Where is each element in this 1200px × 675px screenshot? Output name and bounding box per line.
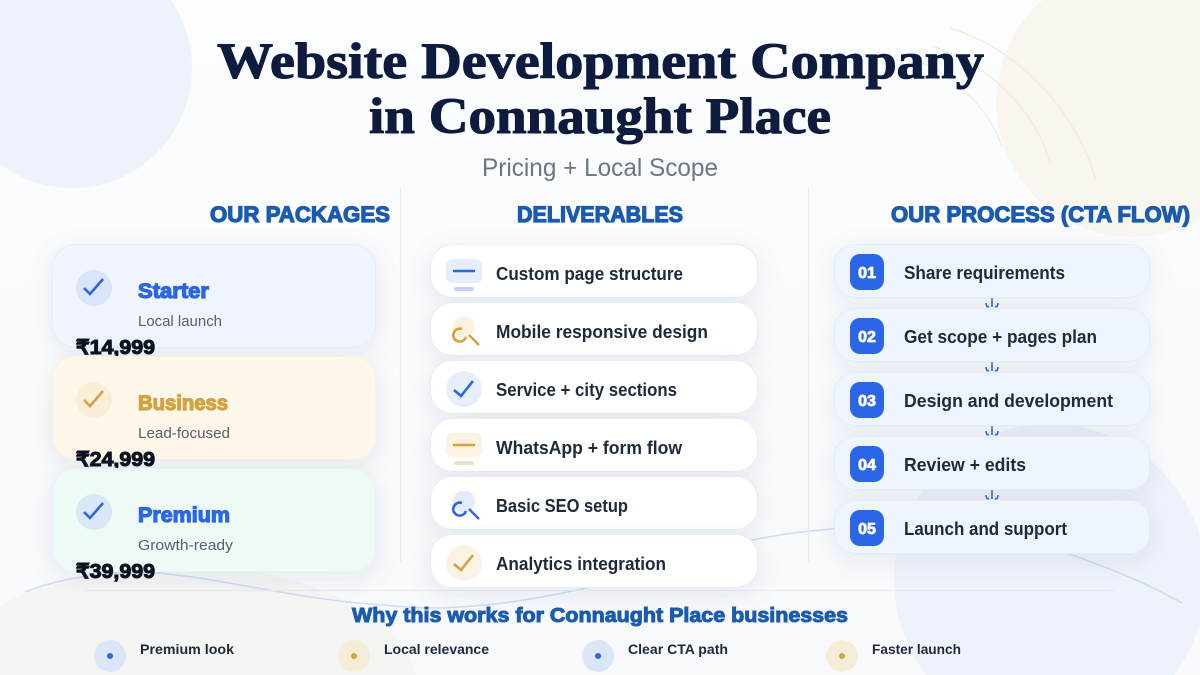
business name: Business bbox=[138, 392, 228, 415]
starter name: Starter bbox=[138, 280, 209, 303]
step 05 bbox=[834, 500, 1150, 554]
step 03 bbox=[834, 372, 1150, 426]
premium price: ₹39,999 bbox=[76, 561, 155, 583]
panel: process bbox=[834, 244, 1150, 554]
badge 05: 05 bbox=[858, 521, 876, 538]
icon: business check bbox=[76, 382, 112, 418]
step 04 bbox=[834, 436, 1150, 490]
benefit: premium look: Premium look bbox=[140, 641, 234, 657]
benefit: faster launch: Faster launch bbox=[872, 641, 961, 657]
package: business bbox=[52, 356, 376, 471]
label: Basic SEO setup bbox=[496, 496, 628, 516]
icon: layout bbox=[446, 259, 482, 291]
badge 05 bbox=[850, 510, 884, 546]
step 01 bbox=[834, 244, 1150, 298]
benefit: local relevance: Local relevance bbox=[384, 641, 489, 657]
icon: blue search bbox=[453, 490, 479, 519]
badge 04 bbox=[850, 446, 884, 482]
panel: deliverables bbox=[430, 244, 758, 588]
badge 04: 04 bbox=[858, 457, 876, 474]
label: Get scope + pages plan bbox=[904, 327, 1097, 347]
title bbox=[217, 34, 984, 145]
step 02 bbox=[834, 308, 1150, 362]
heading: our process: OUR PROCESS (CTA FLOW) bbox=[891, 202, 1190, 227]
deliverable: whatsapp and form flow bbox=[430, 418, 758, 472]
package: starter bbox=[52, 244, 376, 359]
business price: ₹24,999 bbox=[76, 449, 155, 471]
icon: gold layout bbox=[446, 433, 482, 465]
subtitle: Pricing + Local Scope bbox=[482, 154, 718, 182]
badge 02: 02 bbox=[858, 329, 876, 346]
icon: premium check bbox=[76, 494, 112, 530]
title: Website Development Company bbox=[217, 34, 984, 90]
deliverable: basic seo setup bbox=[430, 476, 758, 530]
badge 01 bbox=[850, 254, 884, 290]
label: Design and development bbox=[904, 391, 1113, 411]
title: in Connaught Place bbox=[369, 89, 831, 145]
benefit: clear cta path: Clear CTA path bbox=[628, 641, 728, 657]
benefit: premium look bbox=[94, 640, 234, 672]
deliverable: mobile responsive design bbox=[430, 302, 758, 356]
icon: blue check bbox=[446, 371, 482, 407]
premium description: Growth-ready bbox=[138, 537, 234, 554]
benefit: clear cta path bbox=[582, 640, 728, 672]
business description: Lead-focused bbox=[138, 425, 230, 442]
badge 03 bbox=[850, 382, 884, 418]
panel: packages bbox=[52, 244, 376, 583]
label: Analytics integration bbox=[496, 554, 666, 574]
label: Launch and support bbox=[904, 519, 1067, 539]
heading: deliverables: DELIVERABLES bbox=[517, 202, 683, 227]
badge 01: 01 bbox=[858, 265, 876, 282]
starter description: Local launch bbox=[138, 313, 222, 330]
icon: gold check bbox=[446, 545, 482, 581]
label: Custom page structure bbox=[496, 264, 683, 284]
deliverable: analytics integration bbox=[430, 534, 758, 588]
badge 03: 03 bbox=[858, 393, 876, 410]
label: Review + edits bbox=[904, 455, 1026, 475]
arrow 3 bbox=[986, 426, 998, 435]
benefit: faster launch bbox=[826, 640, 961, 672]
icon: starter check bbox=[76, 270, 112, 306]
deliverable: service and city sections bbox=[430, 360, 758, 414]
badge 02 bbox=[850, 318, 884, 354]
label: WhatsApp + form flow bbox=[496, 438, 683, 458]
label: Share requirements bbox=[904, 263, 1065, 283]
premium name: Premium bbox=[138, 504, 230, 527]
heading: our packages: OUR PACKAGES bbox=[210, 202, 390, 227]
arrow 1 bbox=[986, 298, 998, 307]
arrow 4 bbox=[986, 490, 998, 499]
label: Service + city sections bbox=[496, 380, 677, 400]
icon: gold search bbox=[453, 316, 479, 345]
label: Mobile responsive design bbox=[496, 322, 708, 342]
heading: why this works: Why this works for Connaught Place businesses bbox=[352, 605, 848, 627]
benefit: local relevance bbox=[338, 640, 489, 672]
package: premium bbox=[52, 468, 376, 583]
arrow 2 bbox=[986, 362, 998, 371]
starter price: ₹14,999 bbox=[76, 337, 155, 359]
deliverable: custom page structure bbox=[430, 244, 758, 298]
